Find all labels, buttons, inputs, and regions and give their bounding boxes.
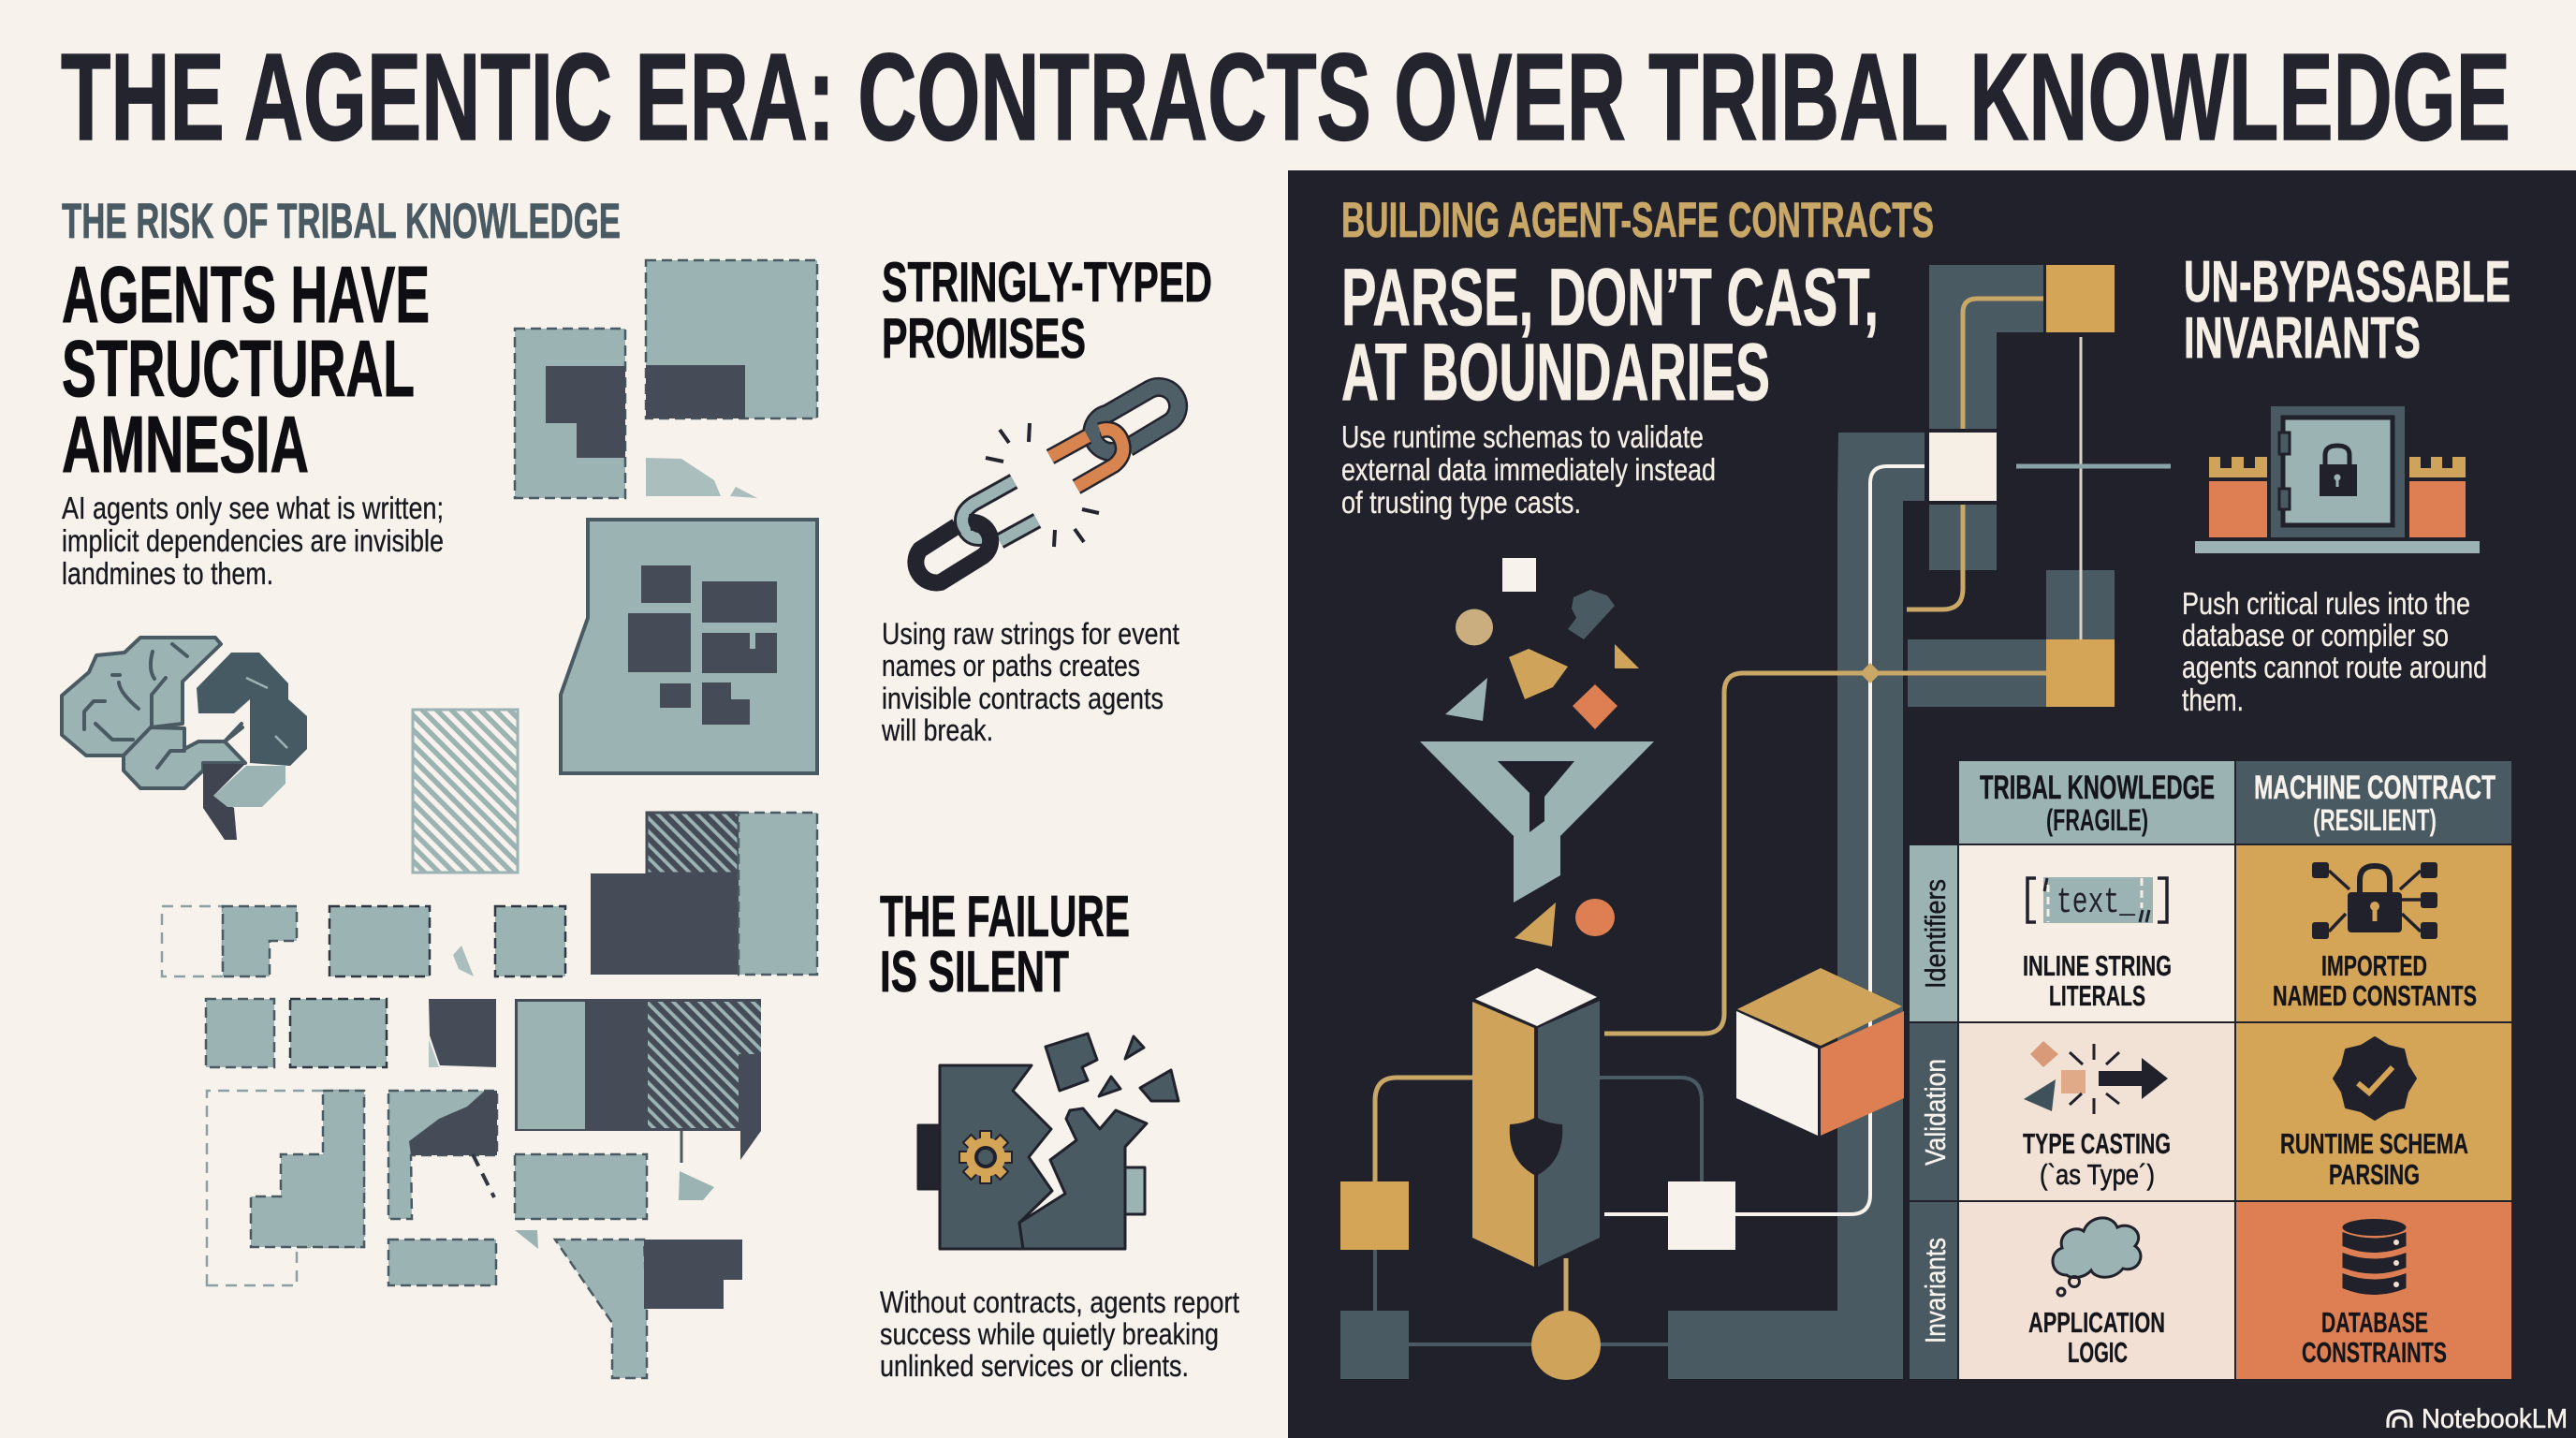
- row label: validation: Validation: [1919, 1059, 1952, 1166]
- cell: imported named constants: [2236, 845, 2511, 1021]
- cell: database constraints: DATABASE: [2321, 1306, 2428, 1339]
- cell: runtime schema parsing: PARSING: [2329, 1158, 2420, 1191]
- icon: shield pillar: [1472, 968, 1600, 1267]
- cell: runtime schema parsing: [2236, 1023, 2511, 1200]
- text block: amnesia description: AI agents only see what is written;: [62, 491, 444, 525]
- cell: type casting: [1959, 1023, 2234, 1200]
- icon: vault with fortress walls: [2195, 406, 2480, 553]
- text block: failure description: unlinked services or clients.: [880, 1349, 1189, 1383]
- heading: agents have structural amnesia: STRUCTURAL: [62, 325, 415, 414]
- cell: database constraints: [2236, 1202, 2511, 1379]
- text block: failure description: success while quietly breaking: [880, 1317, 1219, 1351]
- text block: amnesia description: [62, 491, 444, 591]
- icon: cracked machine: [918, 1034, 1178, 1249]
- text block: failure description: Without contracts, agents report: [880, 1285, 1239, 1319]
- text block: stringly-typed description: will break.: [881, 713, 993, 747]
- column header: machine contract: (RESILIENT): [2313, 803, 2437, 837]
- text block: stringly-typed description: invisible contracts agents: [882, 682, 1164, 715]
- comparison table: [1910, 761, 2511, 1379]
- panel: the risk of tribal knowledge: [62, 194, 817, 1378]
- cell: inline string literals: INLINE STRING: [2023, 949, 2172, 982]
- panel: building agent-safe contracts: [1288, 170, 2576, 1438]
- column header: machine contract: [2236, 761, 2511, 844]
- cell: imported named constants: IMPORTED: [2321, 949, 2427, 982]
- row label: identifiers: [1910, 845, 1957, 1021]
- cell: database constraints: CONSTRAINTS: [2302, 1336, 2447, 1369]
- heading: the failure is silent: IS SILENT: [880, 940, 1069, 1005]
- heading: stringly-typed promises: [882, 251, 1212, 370]
- icon: scattered shapes entering funnel: [1420, 558, 1654, 946]
- heading: parse, don't cast: PARSE, DON’T CAST,: [1341, 253, 1879, 343]
- heading: agents have structural amnesia: AGENTS HAVE: [62, 251, 430, 340]
- text block: parse description: external data immediately instead: [1341, 452, 1716, 487]
- text block: parse description: Use runtime schemas to validate: [1341, 419, 1704, 454]
- text block: invariants description: [2182, 586, 2487, 717]
- cell: application logic: [1959, 1202, 2234, 1379]
- text block: failure description: [880, 1285, 1239, 1383]
- text block: invariants description: them.: [2182, 682, 2244, 717]
- column header: tribal knowledge: (FRAGILE): [2046, 803, 2148, 837]
- heading: un-bypassable invariants: [2184, 250, 2510, 371]
- section heading: contracts: BUILDING AGENT-SAFE CONTRACTS: [1341, 193, 1934, 248]
- heading: agents have structural amnesia: AMNESIA: [62, 401, 309, 490]
- row label: invariants: [1910, 1202, 1957, 1379]
- panel: the failure is silent: [880, 885, 1239, 1383]
- icon: broken chain: [915, 387, 1178, 582]
- heading: agents have structural amnesia: [62, 251, 430, 490]
- heading: the failure is silent: THE FAILURE: [880, 885, 1130, 949]
- cell: inline string literals: text_: [2056, 883, 2135, 923]
- cell: application logic: LOGIC: [2068, 1336, 2128, 1369]
- cell: inline string literals: LITERALS: [2049, 979, 2145, 1012]
- row label: invariants: Invariants: [1919, 1238, 1952, 1343]
- text block: amnesia description: landmines to them.: [62, 556, 273, 591]
- column header: tribal knowledge: [1959, 761, 2234, 844]
- cell: type casting: (`as Type´): [2040, 1158, 2155, 1191]
- text block: parse description: [1341, 419, 1716, 520]
- heading: un-bypassable invariants: INVARIANTS: [2184, 306, 2421, 371]
- icon: fractured brain: [62, 638, 307, 840]
- heading: stringly-typed promises: PROMISES: [882, 307, 1086, 370]
- logo: NotebookLM: NotebookLM: [2422, 1404, 2568, 1434]
- cell: type casting: TYPE CASTING: [2023, 1127, 2171, 1160]
- cell: inline string literals: [1959, 845, 2234, 1021]
- cell: runtime schema parsing: RUNTIME SCHEMA: [2280, 1127, 2468, 1160]
- text block: parse description: of trusting type casts.: [1341, 485, 1581, 520]
- diagram: circuit pipes and nodes: [1340, 265, 2171, 1380]
- text block: stringly-typed description: [881, 617, 1179, 747]
- cell: imported named constants: NAMED CONSTANTS: [2273, 979, 2477, 1012]
- text block: stringly-typed description: names or paths creates: [882, 649, 1140, 682]
- heading: the failure is silent: [880, 885, 1130, 1005]
- row label: identifiers: Identifiers: [1919, 879, 1952, 989]
- heading: stringly-typed promises: STRINGLY-TYPED: [882, 251, 1212, 314]
- text block: invariants description: database or compiler so: [2182, 618, 2449, 653]
- cell: application logic: APPLICATION: [2028, 1306, 2165, 1339]
- heading: parse, don't cast: AT BOUNDARIES: [1341, 328, 1770, 418]
- section heading: risk: THE RISK OF TRIBAL KNOWLEDGE: [62, 194, 621, 249]
- text block: stringly-typed description: Using raw strings for event: [882, 617, 1179, 651]
- icon: validated cube: [1736, 968, 1904, 1136]
- text block: amnesia description: implicit dependencies are invisible: [62, 523, 444, 558]
- row label: validation: [1910, 1023, 1957, 1200]
- text block: invariants description: agents cannot route around: [2182, 650, 2487, 684]
- column header: tribal knowledge: TRIBAL KNOWLEDGE: [1980, 770, 2215, 806]
- illustration: fragmented knowledge map: [162, 260, 817, 1378]
- text block: invariants description: Push critical rules into the: [2182, 586, 2470, 621]
- heading: parse, don't cast: [1341, 253, 1879, 418]
- panel: stringly-typed promises: [881, 251, 1212, 747]
